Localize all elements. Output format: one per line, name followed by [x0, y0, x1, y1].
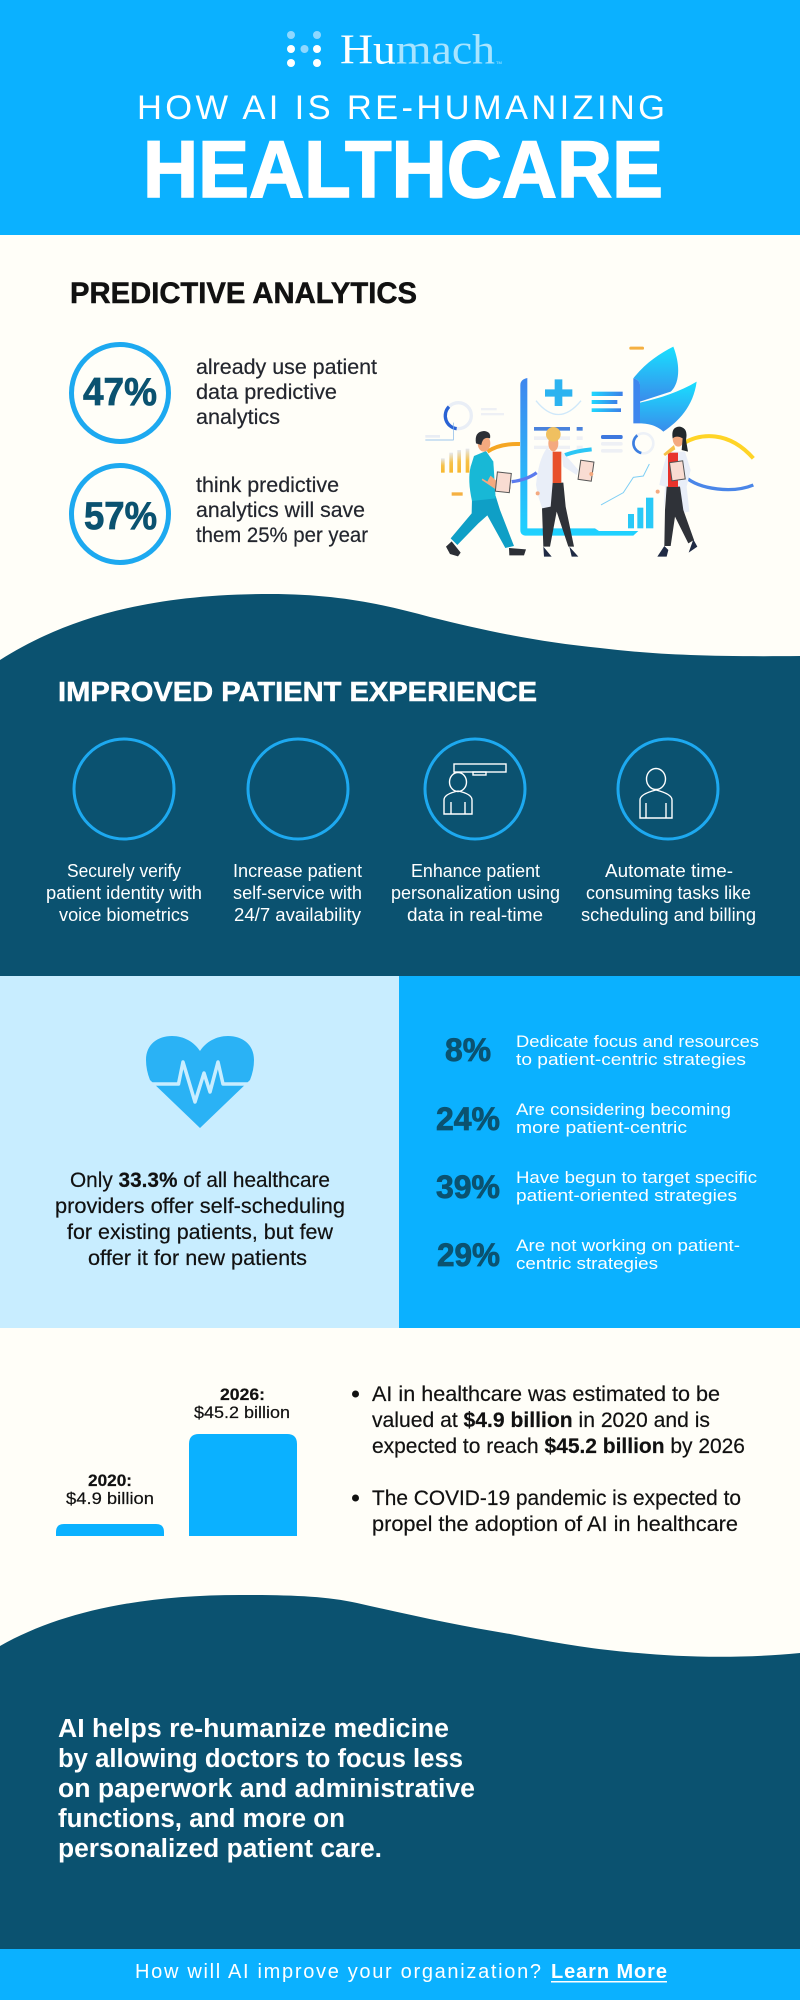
- stat: 47 percent: 47%: [83, 371, 157, 414]
- heading: improved patient experience: IMPROVED PATIENT EXPERIENCE: [58, 676, 537, 707]
- stat: 8 percent: Dedicate focus and resources: [516, 1033, 759, 1051]
- item: automate tasks: Automate time-: [605, 861, 733, 881]
- text: closing statement: personalized patient care.: [58, 1835, 382, 1863]
- text: market bullets: valued at $4.9 billion in 2020 and is: [372, 1409, 710, 1432]
- stat: 39 percent: [436, 1169, 757, 1205]
- stat: 47 percent: data predictive: [196, 381, 337, 404]
- stat: 47 percent: [72, 344, 377, 442]
- text: closing statement: AI helps re-humanize medicine: [58, 1715, 449, 1743]
- icon: person: [640, 768, 672, 818]
- stat: 57 percent: think predictive: [196, 474, 339, 497]
- panel: footer call to action: How will AI improve your organization?: [135, 1961, 541, 1983]
- icon: heart with pulse: [146, 1036, 254, 1128]
- panel: self-scheduling: [0, 976, 399, 1328]
- item: personalization: Enhance patient: [411, 861, 540, 881]
- bar: 2020: 2020:: [88, 1472, 132, 1490]
- stat: 47 percent: analytics: [196, 406, 280, 429]
- text: closing statement: on paperwork and administrative: [58, 1775, 475, 1803]
- title: how AI is re-humanizing: HOW AI IS RE-HUMANIZING: [137, 89, 665, 127]
- panel: closing message: [0, 1595, 800, 1949]
- person: blonde doctor: [536, 427, 594, 557]
- stat: 57 percent: analytics will save: [196, 499, 365, 522]
- text: self-scheduling statistic: for existing patients, but few: [67, 1221, 334, 1244]
- stat: 8 percent: to patient-centric strategies: [516, 1051, 746, 1069]
- stat: 8 percent: [445, 1032, 759, 1069]
- illustration: medical team with clipboard chart: [425, 347, 753, 557]
- item: automate tasks: [581, 739, 756, 925]
- item: personalization: personalization using: [391, 883, 560, 903]
- text: self-scheduling statistic: [55, 1169, 345, 1270]
- logo: Humach: TM: [496, 60, 502, 65]
- stat: 29 percent: [437, 1237, 740, 1273]
- item: self-service: [233, 739, 362, 925]
- bar: 2020: $4.9 billion: [66, 1490, 154, 1508]
- text: closing statement: functions, and more on: [58, 1805, 345, 1833]
- bar chart: AI healthcare market value: [56, 1386, 297, 1536]
- panel: header: [0, 0, 800, 235]
- text: market bullets: expected to reach $45.2 billion by 2026: [372, 1435, 745, 1458]
- stat: 24 percent: more patient-centric: [516, 1119, 687, 1137]
- panel: footer call to action: [0, 1949, 800, 2000]
- text: market bullets: propel the adoption of AI in healthcare: [372, 1513, 738, 1536]
- panel: predictive analytics: [70, 277, 753, 562]
- item: voice biometrics: [46, 739, 202, 925]
- stat: 24 percent: 24%: [436, 1101, 500, 1137]
- stat: 47 percent: already use patient: [196, 356, 377, 379]
- logo: Humach: Humach: [340, 28, 495, 74]
- text: market bullets: [352, 1383, 745, 1536]
- icon: person under monitor: [444, 764, 506, 814]
- text: self-scheduling statistic: providers offer self-scheduling: [55, 1195, 345, 1218]
- item: self-service: Increase patient: [233, 861, 362, 881]
- item: voice biometrics: voice biometrics: [59, 905, 189, 925]
- item: voice biometrics: Securely verify: [67, 861, 181, 881]
- item: self-service: 24/7 availability: [234, 905, 361, 925]
- bar: 2026: [189, 1386, 297, 1536]
- bar: 2026: $45.2 billion: [194, 1404, 290, 1422]
- heading: predictive analytics: PREDICTIVE ANALYTICS: [70, 277, 417, 310]
- stat: 29 percent: Are not working on patient-: [516, 1237, 740, 1255]
- text: self-scheduling statistic: offer it for new patients: [88, 1247, 307, 1270]
- item: self-service: self-service with: [233, 883, 362, 903]
- stat: 57 percent: [72, 466, 368, 562]
- person: doctor with dark hair: [656, 427, 697, 557]
- stat: 57 percent: them 25% per year: [196, 524, 368, 547]
- person: man in teal scrubs: [446, 431, 526, 556]
- item: voice biometrics: patient identity with: [46, 883, 202, 903]
- panel: patient-centric strategies: [399, 976, 800, 1328]
- bar: 2020: [56, 1472, 164, 1536]
- item: automate tasks: scheduling and billing: [581, 905, 756, 925]
- title: healthcare: HEALTHCARE: [143, 125, 663, 215]
- item: personalization: [391, 739, 560, 925]
- text: closing statement: [58, 1715, 475, 1863]
- text: self-scheduling statistic: Only 33.3% of all healthcare: [70, 1169, 330, 1192]
- text: market bullets: AI in healthcare was estimated to be: [372, 1383, 720, 1406]
- link: learn more: Learn More: [551, 1961, 667, 1983]
- stat: 57 percent: 57%: [84, 495, 157, 538]
- stat: 24 percent: [436, 1101, 731, 1137]
- stat: 29 percent: 29%: [437, 1237, 500, 1273]
- item: personalization: data in real-time: [407, 905, 543, 925]
- stat: 39 percent: 39%: [436, 1169, 500, 1205]
- text: market bullets: The COVID-19 pandemic is expected to: [372, 1487, 741, 1510]
- stat: 8 percent: 8%: [445, 1032, 491, 1068]
- item: automate tasks: consuming tasks like: [586, 883, 751, 903]
- stat: 39 percent: Have begun to target specific: [516, 1169, 757, 1187]
- bar: 2026: 2026:: [220, 1386, 265, 1404]
- stat: 24 percent: Are considering becoming: [516, 1101, 731, 1119]
- text: closing statement: by allowing doctors to focus less: [58, 1745, 463, 1773]
- logo: Humach: [287, 28, 502, 74]
- stat: 39 percent: patient-oriented strategies: [516, 1187, 737, 1205]
- panel: improved patient experience: [0, 594, 800, 976]
- stat: 29 percent: centric strategies: [516, 1255, 658, 1273]
